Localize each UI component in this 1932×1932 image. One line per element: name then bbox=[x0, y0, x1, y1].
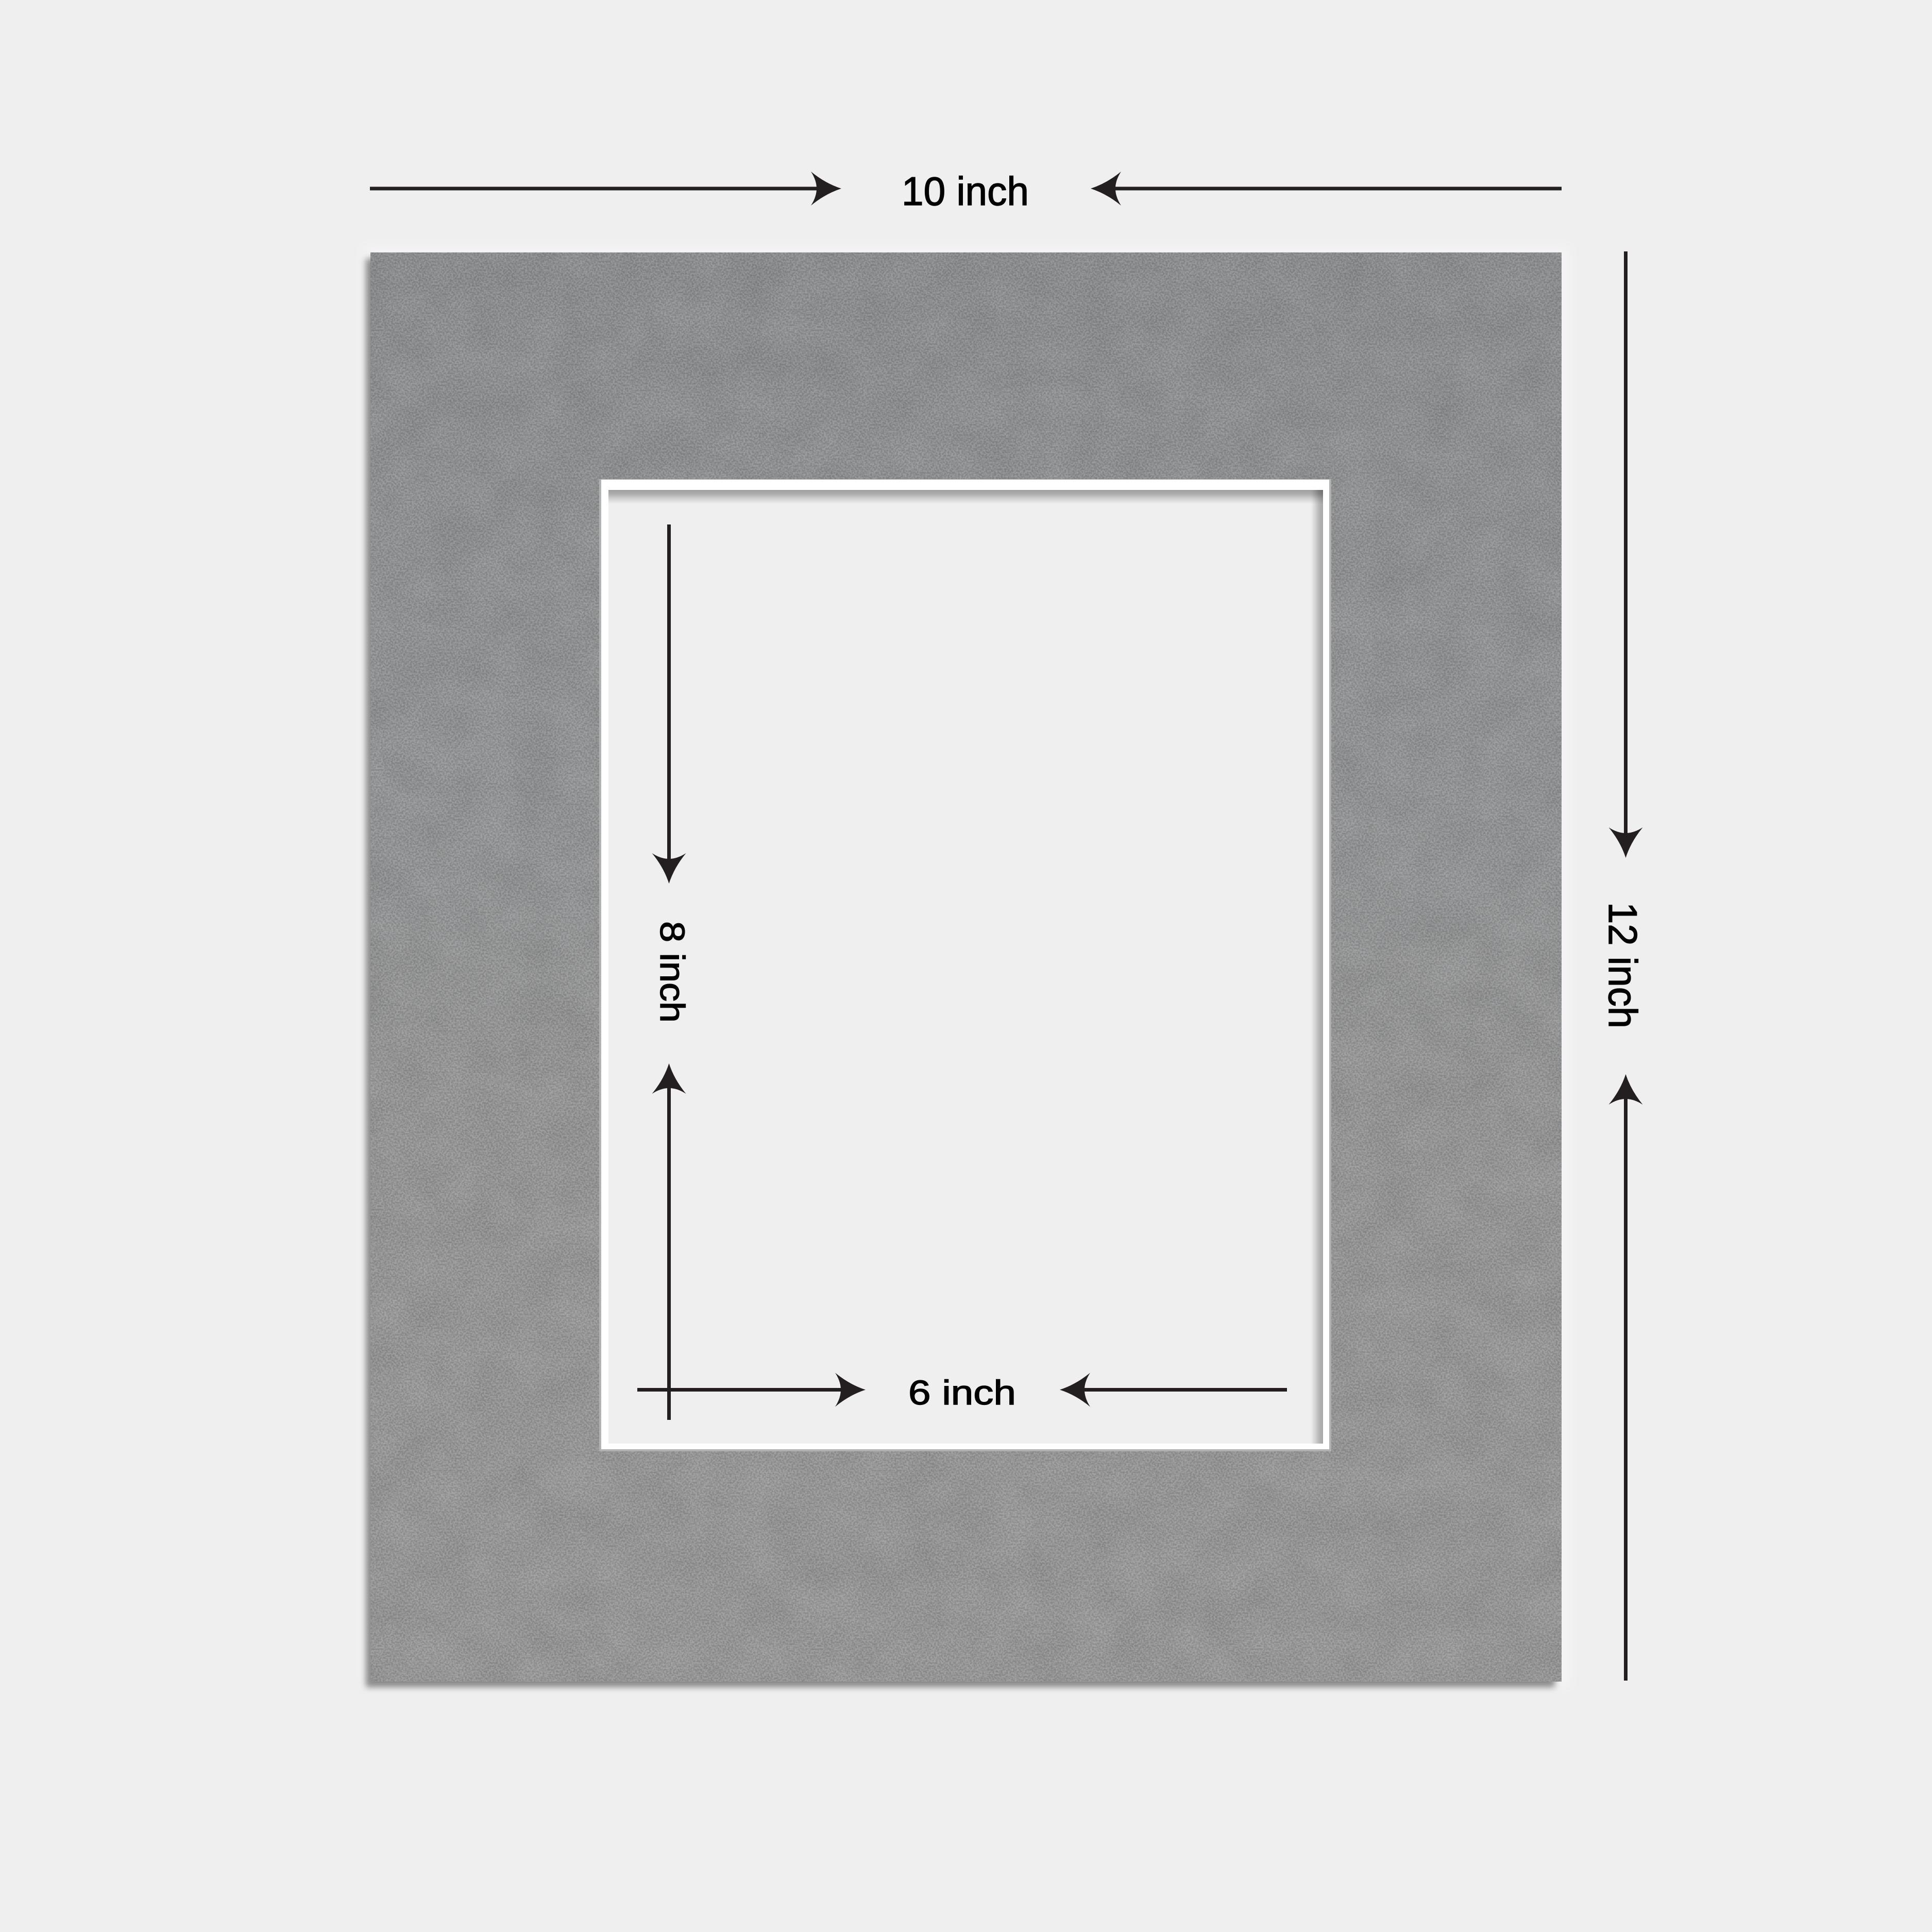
arrow: 10 inch right bbox=[1091, 172, 1562, 206]
arrow: 8 inch bottom bbox=[652, 1063, 686, 1420]
mat paper texture: blotches bbox=[370, 252, 1562, 1682]
mat paper texture: grain bbox=[370, 252, 1562, 1682]
label: 6 inch: 6 inch bbox=[908, 1374, 1016, 1412]
arrow: 8 inch top bbox=[652, 524, 686, 884]
label: 8 inch: 8 inch bbox=[653, 921, 691, 1023]
panel: mat board bbox=[363, 245, 1570, 1688]
arrow: 12 inch bottom bbox=[1608, 1074, 1642, 1681]
arrow: 12 inch top bbox=[1608, 251, 1642, 858]
mat drop shadow bbox=[366, 259, 1555, 1687]
window interior bbox=[608, 490, 1323, 1444]
panel: window opening bbox=[599, 479, 1331, 1451]
label: 12 inch: 12 inch bbox=[1600, 902, 1646, 1028]
arrow: 6 inch left bbox=[637, 1372, 866, 1406]
inner shadow right bbox=[1310, 490, 1323, 1444]
mat surface bbox=[370, 252, 1562, 1682]
label: 10 inch: 10 inch bbox=[902, 168, 1029, 214]
arrow: 6 inch right bbox=[1060, 1372, 1287, 1406]
cut edge shade bbox=[599, 479, 1331, 1451]
arrow: 10 inch left bbox=[370, 172, 841, 206]
white bevel bbox=[601, 480, 1329, 1449]
inner shadow top bbox=[608, 490, 1323, 504]
mat highlight glow bbox=[363, 245, 1570, 1688]
